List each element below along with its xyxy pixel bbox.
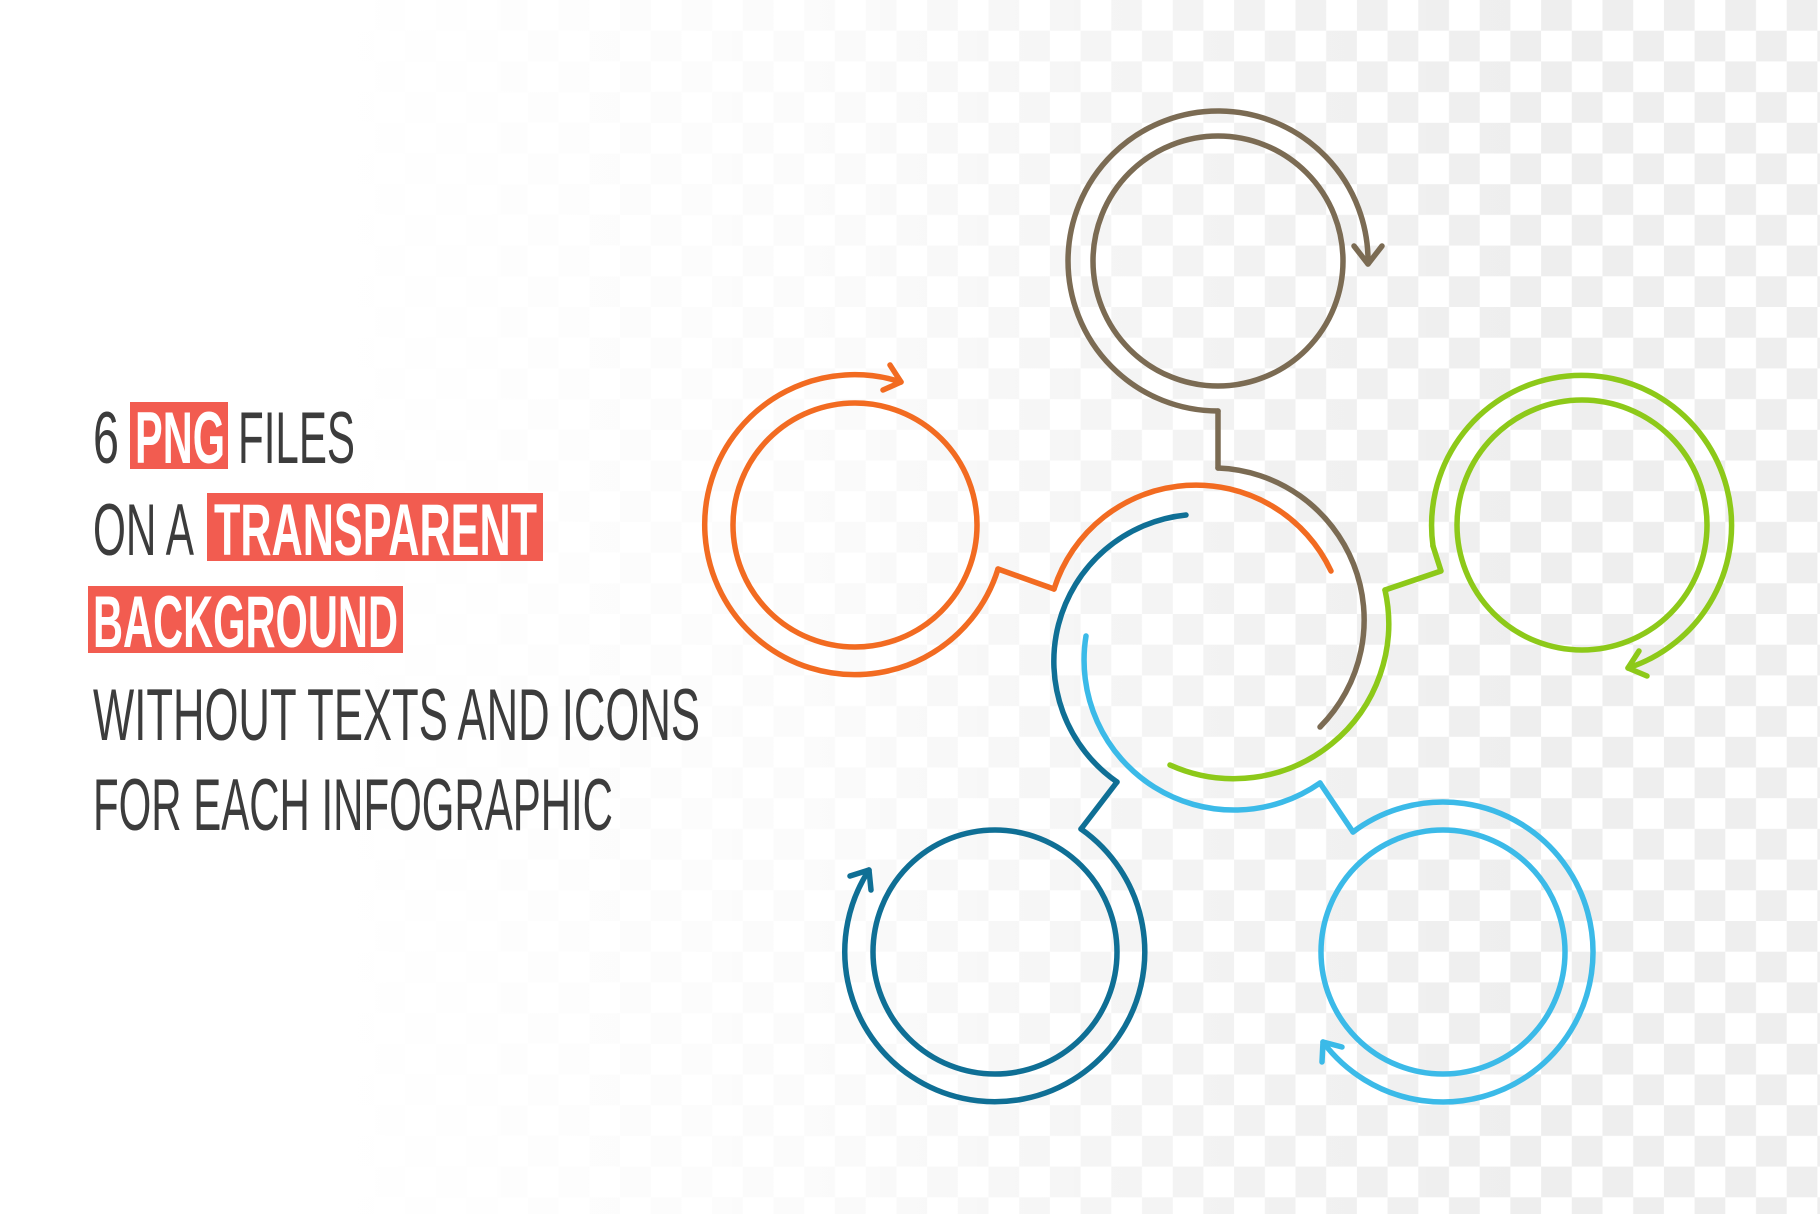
line 3: BACKGROUND — [88, 582, 403, 663]
headline text block — [88, 398, 700, 846]
step: orange (left) — [705, 365, 1331, 675]
line 2: ON A TRANSPARENT: ON A — [93, 490, 194, 571]
step: green (right) — [1170, 375, 1732, 779]
line 2: ON A TRANSPARENT: TRANSPARENT — [214, 490, 537, 571]
step: brown (top) — [1068, 111, 1382, 727]
line 2: ON A TRANSPARENT — [93, 490, 543, 571]
step: dark blue (bottom left) — [845, 515, 1186, 1102]
line 3: BACKGROUND: BACKGROUND — [93, 582, 398, 663]
step: light blue (bottom right) — [1084, 636, 1593, 1102]
line 1: 6 PNG FILES: FILES — [238, 398, 355, 479]
line 1: 6 PNG FILES: 6 — [93, 398, 119, 479]
line 5: FOR EACH INFOGRAPHIC — [93, 765, 613, 846]
line 1: 6 PNG FILES — [93, 398, 355, 479]
line 4: WITHOUT TEXTS AND ICONS — [93, 675, 700, 756]
cycle diagram — [705, 111, 1732, 1102]
line 1: 6 PNG FILES: PNG — [135, 398, 225, 479]
